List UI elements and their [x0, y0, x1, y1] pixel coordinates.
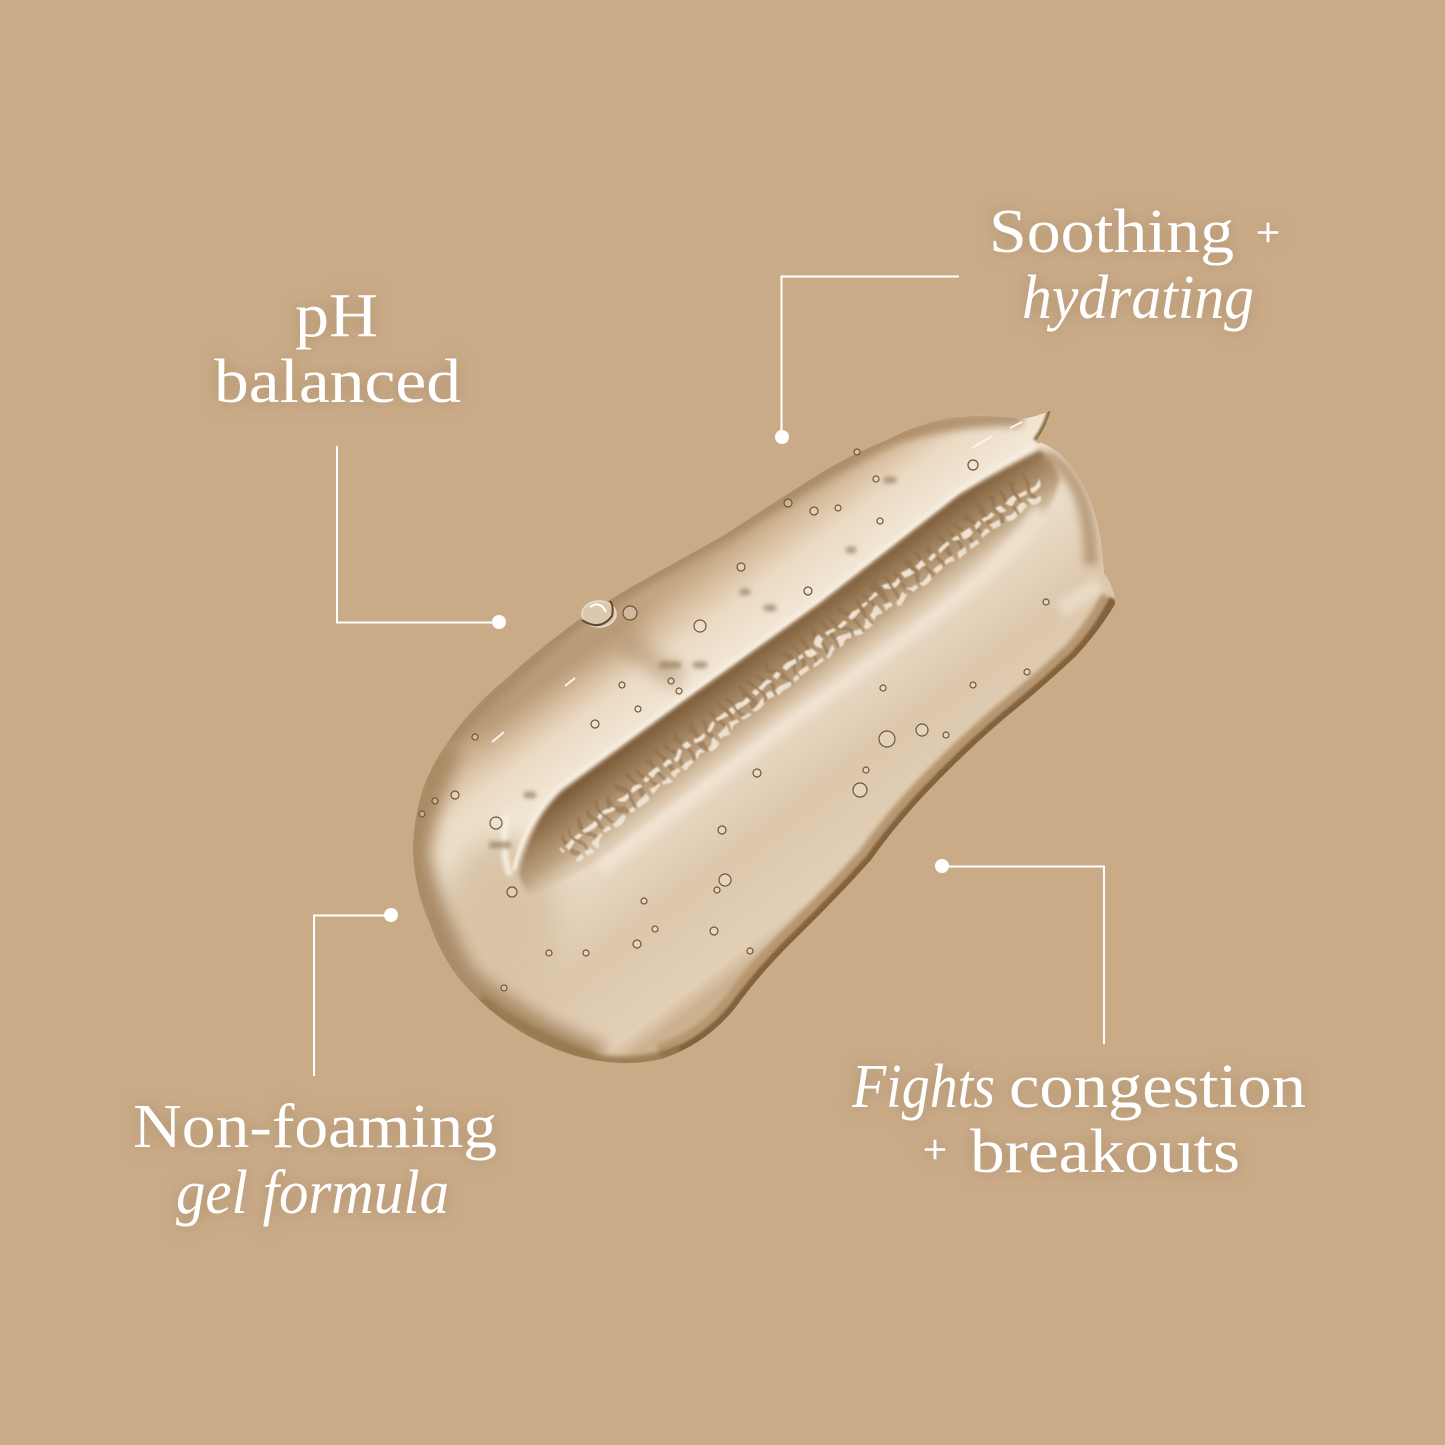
label: non-foaming gel formula: Non-foaming	[133, 1093, 497, 1161]
groove upper bright edge	[514, 446, 1034, 870]
left rim shading	[413, 743, 600, 1061]
smudge by large drop	[620, 640, 680, 680]
top edge shading	[447, 419, 1022, 743]
connector: fights congestion	[935, 859, 1104, 1044]
lower left blend	[438, 835, 562, 1015]
right end lobe glow	[1060, 585, 1100, 610]
lower right rim dark	[661, 600, 1115, 1059]
label: soothing hydrating: +	[1256, 210, 1280, 255]
label: pH balanced: balanced	[214, 348, 461, 416]
label: fights congestion breakouts	[851, 1053, 1306, 1186]
groove end shading	[1045, 455, 1090, 565]
speculars	[492, 422, 1022, 742]
callout: fights congestion	[851, 859, 1306, 1186]
callout: soothing hydrating	[775, 198, 1280, 444]
ripple band	[560, 482, 1040, 862]
label: fights congestion breakouts: breakouts	[970, 1118, 1240, 1186]
label: fights congestion breakouts: Fights	[851, 1053, 995, 1121]
label: pH balanced	[214, 282, 461, 416]
callout: non-foaming gel	[133, 908, 497, 1227]
lower right rim band	[661, 600, 1115, 1059]
bubbles	[419, 449, 1049, 991]
label: pH balanced: pH	[295, 282, 378, 350]
connector: non-foaming gel	[314, 908, 398, 1076]
callout: pH balanced	[214, 282, 506, 629]
label: fights congestion breakouts: congestion	[1009, 1053, 1306, 1121]
label: fights congestion breakouts: +	[923, 1127, 947, 1172]
label: soothing hydrating: Soothing	[989, 198, 1234, 266]
label: non-foaming gel formula: gel formula	[176, 1159, 449, 1227]
gel swatch	[380, 400, 1115, 1063]
connector: pH balanced	[337, 446, 506, 629]
connector: soothing hydrating	[775, 276, 959, 444]
large drop	[582, 601, 616, 627]
label: soothing hydrating	[989, 198, 1280, 332]
spots	[492, 480, 893, 845]
tip shading	[1036, 410, 1051, 441]
groove	[519, 450, 1060, 899]
label: soothing hydrating: hydrating	[1022, 264, 1254, 332]
groove lower soft highlight	[600, 510, 1040, 868]
bottom rim	[480, 1000, 680, 1062]
darker left mid area	[470, 620, 640, 735]
upper clear lobe	[380, 400, 1060, 960]
label: non-foaming gel formula	[133, 1093, 497, 1227]
white streak left of groove end	[504, 815, 510, 875]
